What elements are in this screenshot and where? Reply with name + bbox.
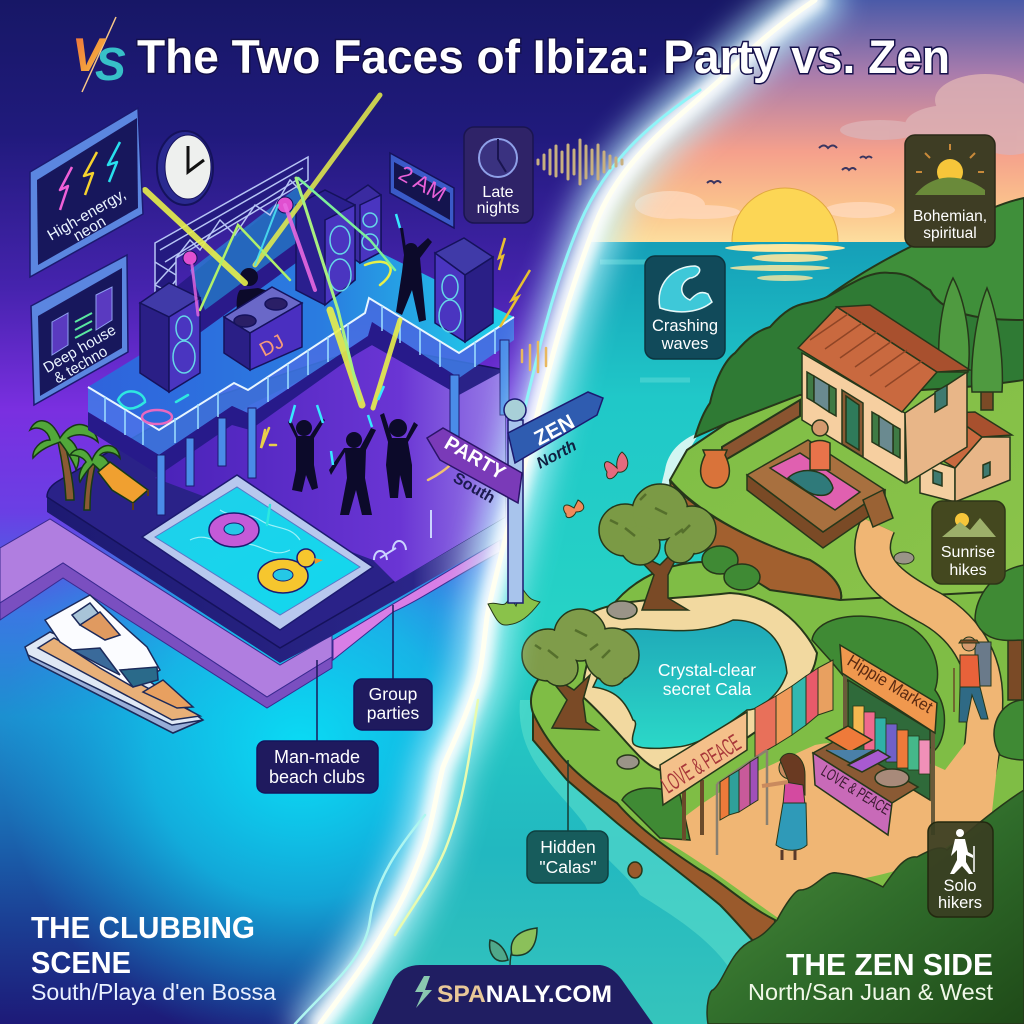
clay pot on the lawn (701, 450, 729, 488)
clock moon icon (479, 139, 517, 177)
sand around the cove (583, 593, 817, 770)
island: upper green hillside (670, 198, 1024, 620)
glow sticks (290, 193, 415, 465)
dj silhouette (237, 268, 278, 325)
cliff base of lower land (533, 713, 790, 945)
stage spotlights (183, 197, 293, 265)
icon: vs logo: S (95, 38, 126, 90)
party sign: South (450, 470, 498, 507)
zen sign (508, 392, 603, 473)
hippie market stall (813, 645, 937, 835)
upper olive tree (599, 484, 760, 619)
neon floor scribbles (118, 262, 453, 525)
love and peace banner: LOVE & PEACE (657, 730, 746, 799)
sound wave (538, 140, 622, 184)
callout: group parties: Group (369, 684, 417, 704)
dj neon label: DJ (256, 331, 288, 361)
speaker center-back (296, 190, 355, 305)
purple lower pier (0, 519, 500, 708)
dancer on the upper deck (396, 228, 432, 322)
pool (142, 475, 431, 630)
title: The Two Faces of Ibiza: Party vs. Zen (137, 30, 950, 83)
text: crystal-clear secret cala: Crystal-clear (658, 660, 756, 680)
neon panel: high-energy (30, 108, 143, 277)
lower olive tree (522, 609, 642, 878)
badge: sunrise hikes: Sunrise (941, 544, 995, 561)
heading: the clubbing scene: THE CLUBBING (31, 910, 255, 945)
hiker on trail (954, 637, 991, 722)
pink donut float (209, 513, 259, 547)
wave icon (659, 266, 712, 312)
neon 2 am sign: 2 AM (395, 161, 450, 207)
wall clock (157, 131, 213, 205)
yacht (25, 595, 203, 733)
island: lower land grass and cliff (531, 562, 1024, 1024)
badge: late nights: Late (482, 184, 514, 201)
icon: flying birds (707, 146, 872, 183)
heading: the clubbing scene (31, 910, 276, 1005)
cyan water glow on clubbing side (32, 549, 480, 1024)
badge: bohemian, spiritual: spiritual (923, 225, 977, 242)
mountain icon (942, 513, 996, 537)
dark foliage in the bottom-right corner (707, 790, 1024, 1024)
stall posts (845, 670, 933, 835)
callout: hidden calas: Hidden (540, 837, 596, 857)
badge: bohemian, spiritual (905, 135, 995, 247)
neon bolts at stage edge (499, 238, 546, 372)
callout: hidden calas (527, 760, 608, 883)
zen sign: ZEN (531, 410, 578, 450)
market sign: Hippie Market (844, 651, 936, 717)
small side house (917, 412, 1012, 502)
badge: crashing waves (645, 256, 725, 359)
icon: vs logo (72, 17, 126, 92)
heading: the clubbing scene: South/Playa d'en Bossa (31, 979, 276, 1005)
right side trees (975, 565, 1024, 760)
callout: man-made beach clubs: Man-made (274, 747, 360, 767)
party sign (427, 428, 522, 507)
raised dj deck (88, 240, 514, 475)
badge: late nights: nights (477, 200, 519, 217)
speaker front-left (140, 283, 200, 392)
clouds at top right (840, 74, 1024, 155)
text: crystal-clear secret cala: secret Cala (663, 679, 752, 699)
love and peace banner (657, 712, 747, 840)
party sign: PARTY (440, 432, 509, 485)
cliff face under the hill (670, 480, 841, 620)
cloud by the horizon (635, 191, 895, 219)
clothes rack (717, 750, 767, 855)
speaker right (435, 238, 493, 342)
butterflies (564, 452, 628, 518)
label: & techno (51, 343, 111, 387)
neon panel: deep house and techno (31, 255, 128, 405)
callout: man-made beach clubs (257, 660, 378, 793)
cypress trees (939, 278, 1002, 410)
neon 2 am sign (390, 153, 454, 228)
dj booth (224, 287, 302, 370)
lighting truss (155, 157, 308, 340)
lounge chair (98, 462, 148, 510)
signpost: party and zen (427, 392, 603, 625)
sandy plaza (660, 740, 1000, 918)
panel: zen side background with sky and sea (300, 0, 1024, 1024)
zen sign: North (534, 437, 580, 473)
mini speakers (52, 287, 112, 355)
badge: crashing waves: waves (661, 335, 708, 353)
lawn (670, 330, 1024, 603)
colorful scarves on a line (755, 660, 833, 757)
palm trees with lounge chair (30, 421, 148, 510)
lighter shallows around the lower coast (520, 700, 800, 1000)
main farmhouse with terracotta roof (798, 305, 970, 483)
badge: solo hikers (928, 822, 993, 917)
hillside bushes (695, 273, 1024, 437)
badge: solo hikers: Solo (943, 877, 977, 895)
sea (300, 242, 1024, 1024)
heading: the zen side: North/San Juan & West (748, 979, 994, 1005)
sunrise hill icon (915, 144, 985, 195)
badge: solo hikers: hikers (938, 894, 982, 912)
deck railing (88, 298, 514, 430)
heading: the zen side (748, 947, 994, 1005)
footer badge: spanaly.com (372, 965, 653, 1024)
hiker icon (950, 829, 974, 874)
laser beams (145, 95, 400, 408)
crystal-clear cove water (593, 620, 787, 748)
label: High-energy, (45, 186, 129, 244)
sprout above footer (490, 928, 537, 966)
text: crystal-clear secret cala (658, 660, 756, 699)
club base platform (47, 345, 505, 663)
yellow duck float (258, 549, 323, 593)
shopper woman (762, 753, 807, 860)
badge: bohemian, spiritual: Bohemian, (913, 208, 987, 225)
panel: clubbing side background (0, 0, 815, 1024)
stage back wall (176, 180, 308, 340)
retaining wall (722, 400, 800, 462)
glowing divider between the two sides (295, 0, 815, 1024)
trail from deck to market (873, 525, 985, 800)
logo bolt (415, 976, 432, 1008)
sun setting over the sea (732, 188, 838, 242)
heading: the clubbing scene: SCENE (31, 945, 131, 980)
callout: man-made beach clubs: beach clubs (269, 767, 365, 787)
heading: the zen side: THE ZEN SIDE (786, 947, 993, 982)
distant hill (827, 198, 1024, 400)
footer badge: spanaly.com: SPANALY.COM (437, 981, 612, 1008)
callout: hidden calas: "Calas" (539, 857, 597, 877)
dancer one (288, 418, 325, 492)
neon lightning bolts (60, 142, 120, 210)
party crowd silhouettes (288, 413, 418, 515)
sign leaves at post base (488, 588, 540, 625)
deck support pillars (157, 340, 509, 515)
dancer two (329, 428, 376, 515)
hippie market stall: LOVE & PEACE (818, 763, 893, 819)
badge: sunrise hikes: hikes (949, 562, 987, 579)
label: neon (71, 213, 109, 245)
windows and door (807, 372, 836, 416)
label: Deep house (40, 322, 119, 377)
icon: vs logo: V (72, 28, 107, 81)
coastal foam by the hillside (659, 432, 700, 520)
dark trees behind the market (622, 616, 944, 840)
callout: group parties: parties (367, 703, 420, 723)
deck rail posts (105, 306, 495, 445)
lower land grass (531, 562, 1024, 1024)
badge: crashing waves: Crashing (652, 317, 718, 335)
yoga deck with meditating figure (747, 420, 893, 548)
table with folded goods (813, 740, 918, 803)
meditating person (788, 420, 833, 495)
callout: group parties (354, 605, 432, 730)
badge: late nights (464, 127, 533, 223)
badge: sunrise hikes (932, 501, 1005, 584)
dancer three (380, 413, 418, 498)
t-shirt rack (853, 706, 930, 774)
speaker back-right (341, 185, 381, 263)
